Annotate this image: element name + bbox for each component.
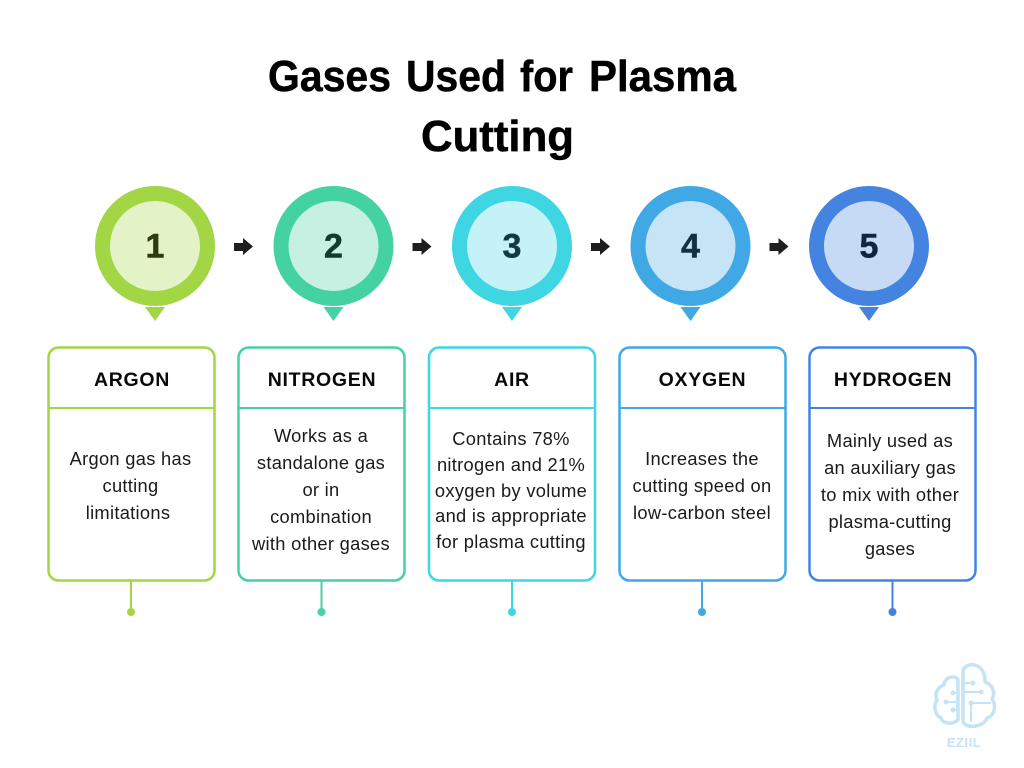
panel: oxygen: Increases the [645,448,759,469]
panel: hydrogen: gases [865,538,915,559]
panel: argon: cutting [103,475,158,496]
title [268,52,737,161]
panel: air: and is appropriate [435,505,587,526]
arrow 4 to 5 [770,238,788,255]
panel: argon: ARGON [94,369,170,391]
panel: nitrogen: or in [302,479,340,500]
panel: air: nitrogen and 21% [437,454,585,475]
panel: air: oxygen by volume [435,480,587,501]
panel: hydrogen: Mainly used as [827,430,953,451]
step marker 1: 1 [146,228,164,266]
panel: hydrogen [810,348,976,616]
panel: hydrogen: to mix with other [821,484,959,505]
panel: nitrogen: with other gases [251,533,390,554]
title: Gases [268,52,391,101]
panel: oxygen: low-carbon steel [633,502,771,523]
step marker 5: 5 [860,228,878,266]
panel: oxygen: cutting speed on [633,475,771,496]
step marker 4: 4 [681,228,700,266]
step marker 5 [809,186,929,321]
logo: EZIIL brain [935,665,994,750]
arrow 2 to 3 [412,238,432,255]
title: for [520,52,573,101]
title: Cutting [421,112,574,161]
arrow 3 to 4 [591,238,610,255]
panel: argon [48,348,214,616]
title: Plasma [589,52,737,101]
panel: argon: Argon gas has [70,448,191,469]
step marker 1 [95,186,215,321]
title: Used [406,52,506,101]
panel: air: AIR [494,369,530,391]
step marker 3: 3 [503,228,521,266]
panel: hydrogen: HYDROGEN [834,369,952,391]
panel: oxygen [620,348,786,616]
panel: air: for plasma cutting [436,531,586,552]
logo: EZIIL brain: EZIIL [947,735,981,750]
panel: argon: limitations [86,502,170,523]
step marker 2: 2 [324,228,343,266]
panel: nitrogen: standalone gas [257,452,385,473]
panel: nitrogen [238,348,404,616]
step marker 3 [452,186,572,321]
panel: air [429,348,595,616]
panel: hydrogen: plasma-cutting [828,511,952,532]
step marker 4 [630,186,750,321]
panel: oxygen: OXYGEN [659,369,746,391]
panel: nitrogen: Works as a [274,425,369,446]
panel: hydrogen: an auxiliary gas [824,457,956,478]
panel: air: Contains 78% [452,428,570,449]
step marker 2 [274,186,394,321]
panel: nitrogen: NITROGEN [268,369,376,391]
panel: nitrogen: combination [270,506,372,527]
arrow 1 to 2 [234,238,253,255]
